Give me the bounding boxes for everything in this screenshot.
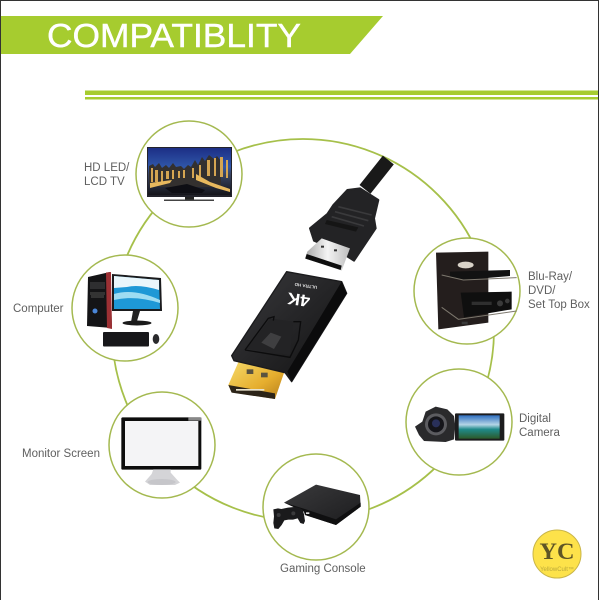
YellowCult logo: YC bbox=[540, 539, 574, 564]
HDMI cable and plug bbox=[305, 160, 388, 271]
title banner: COMPATIBLITY bbox=[47, 17, 301, 54]
connecting ring bbox=[112, 139, 494, 521]
device: gaming console bbox=[263, 454, 369, 560]
label: Blu-ray / DVD / set top box: Set Top Box bbox=[528, 299, 590, 311]
title banner bbox=[1, 16, 383, 54]
YellowCult logo: YellowCult™ bbox=[540, 566, 574, 573]
label: HD LED / LCD TV: LCD TV bbox=[84, 176, 125, 188]
device: Blu-ray shelf bbox=[414, 238, 520, 344]
double rule bbox=[85, 90, 598, 100]
label: gaming console: Gaming Console bbox=[280, 563, 366, 575]
YellowCult logo bbox=[533, 530, 581, 578]
device: TV bbox=[136, 121, 242, 227]
label: digital camera: Digital bbox=[519, 413, 551, 425]
DisplayPort adapter bbox=[228, 272, 347, 399]
label: monitor screen: Monitor Screen bbox=[22, 448, 100, 460]
device: computer bbox=[72, 255, 178, 361]
device: monitor screen bbox=[109, 392, 215, 498]
label: Blu-ray / DVD / set top box: Blu-Ray/ bbox=[528, 271, 573, 283]
label: Blu-ray / DVD / set top box: DVD/ bbox=[528, 285, 556, 297]
DisplayPort adapter: ULTRA HD bbox=[294, 282, 317, 290]
DisplayPort adapter: 4K bbox=[286, 289, 311, 311]
label: HD LED / LCD TV: HD LED/ bbox=[84, 162, 130, 174]
device: digital camera bbox=[406, 369, 512, 475]
label: computer: Computer bbox=[13, 303, 64, 315]
label: digital camera: Camera bbox=[519, 427, 561, 439]
